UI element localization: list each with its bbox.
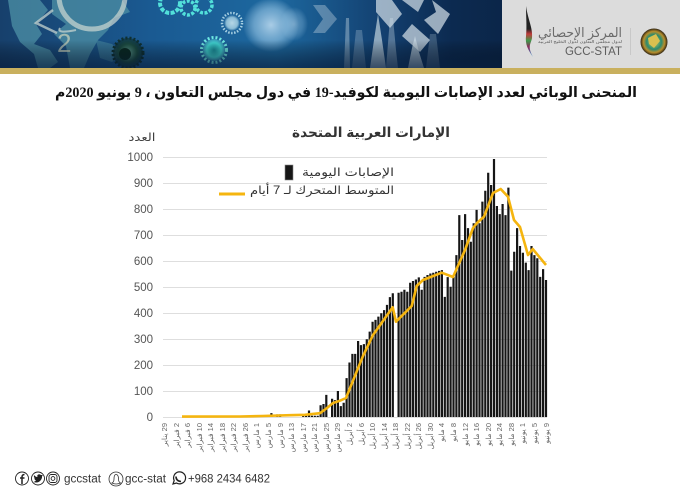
daily cases bars — [271, 159, 546, 417]
logo latin name: GCC-STAT — [565, 44, 623, 58]
title: المنحنى الوبائي لعدد الإصابات اليومية لكوفيد-19 في دول مجلس التعاون ، 9 يونيو 2020م — [55, 85, 637, 101]
x-axis date labels: 16 مايو — [472, 423, 481, 447]
x-axis date labels: 14 أبريل — [379, 423, 389, 450]
icon: cyan virus — [202, 38, 226, 62]
footer social contacts — [16, 472, 270, 486]
header banner — [0, 0, 503, 68]
ring and numeral: 2 — [57, 28, 71, 58]
icon: facebook — [16, 472, 28, 485]
y-axis labels — [127, 152, 153, 424]
phone number: +968 2434 6482 — [188, 474, 270, 486]
x-axis date labels: 2 فبراير — [172, 423, 181, 449]
world map — [8, 0, 130, 68]
handle: gccstat: gccstat — [64, 474, 102, 486]
x-axis date labels: 2 أبريل — [344, 423, 354, 445]
x-axis date labels: 13 مارس — [287, 423, 296, 453]
legend — [219, 165, 394, 198]
chart title: الإمارات العربية المتحدة — [292, 125, 450, 140]
x-axis date labels: 10 فبراير — [195, 423, 204, 453]
icon: GCC emblem — [640, 28, 668, 56]
x-axis date labels: 1 يونيو — [518, 423, 527, 444]
handle: gcc-stat: gcc-stat — [125, 474, 167, 486]
x-axis date labels: 6 أبريل — [356, 423, 366, 445]
x-axis date labels: 29 مارس — [333, 423, 342, 453]
icon: instagram — [46, 472, 60, 485]
skyline — [344, 14, 440, 68]
x-axis date labels: 9 مارس — [276, 423, 285, 448]
icon: pale virus — [222, 13, 242, 33]
x-axis date labels: 28 مايو — [507, 423, 516, 447]
x-axis date labels: 14 فبراير — [206, 423, 215, 453]
x-axis date labels: 20 مايو — [484, 423, 493, 447]
y-axis labels: 1000 — [127, 152, 153, 164]
logo arabic name: المركز الإحصائي — [538, 25, 622, 41]
x-axis date labels: 18 أبريل — [390, 423, 400, 450]
x-axis date labels: 4 مايو — [437, 423, 446, 443]
gold band — [0, 68, 680, 74]
x-axis date labels: 10 أبريل — [367, 423, 377, 450]
x-axis date labels: 8 مايو — [449, 423, 458, 443]
x-axis date labels: 5 مارس — [264, 423, 273, 448]
x-axis date labels: 26 أبريل — [413, 423, 423, 450]
legend label: daily cases: الإصابات اليومية — [302, 167, 394, 180]
x-axis date labels: 1 مارس — [252, 423, 261, 448]
y-axis labels: 800 — [134, 204, 153, 216]
y-axis title: العدد — [128, 132, 156, 144]
icon: cyan virus cluster — [160, 0, 212, 15]
logo subtitle: لدول مجلس التعاون لدول الخليج العربية — [538, 39, 622, 44]
x-axis date labels: 25 مارس — [322, 423, 331, 453]
icon: snapchat — [109, 472, 123, 486]
y-axis labels: 200 — [134, 360, 153, 372]
y-axis labels: 700 — [134, 230, 153, 242]
x-axis date labels: 17 مارس — [299, 423, 308, 453]
y-axis labels: 500 — [134, 282, 153, 294]
x-axis date labels: 6 فبراير — [183, 423, 192, 449]
x-axis date labels: 22 أبريل — [402, 423, 412, 450]
x-axis date labels: 29 يناير — [160, 423, 169, 447]
logo panel — [502, 0, 680, 68]
icon: twitter — [32, 472, 44, 485]
x-axis date labels: 12 مايو — [461, 423, 470, 447]
x-axis date labels — [160, 423, 551, 453]
legend swatch: daily cases — [285, 165, 293, 180]
icon: ribbon — [526, 6, 533, 57]
x-axis date labels: 9 يونيو — [542, 423, 551, 444]
legend label: moving average: المتوسط المتحرك لـ 7 أيام — [250, 182, 394, 198]
legend swatch: moving average — [219, 192, 245, 196]
y-axis labels: 400 — [134, 308, 153, 320]
x-axis date labels: 21 مارس — [310, 423, 319, 453]
x-axis date labels: 5 يونيو — [530, 423, 539, 444]
icon: dark green virus — [113, 38, 143, 68]
x-axis date labels: 22 فبراير — [229, 423, 238, 453]
y-axis labels: 100 — [134, 386, 153, 398]
x-axis date labels: 18 فبراير — [218, 423, 227, 453]
7-day moving average line — [182, 189, 546, 417]
y-axis labels: 900 — [134, 178, 153, 190]
chart — [127, 125, 551, 453]
icon: whatsapp — [173, 472, 186, 484]
icon: dispersing particles — [243, 0, 308, 52]
y-axis labels: 600 — [134, 256, 153, 268]
arrows — [313, 0, 450, 52]
y-axis labels: 300 — [134, 334, 153, 346]
y-axis labels: 0 — [147, 412, 153, 424]
ring and numeral — [36, 0, 125, 58]
x-axis date labels: 26 فبراير — [241, 423, 250, 453]
x-axis date labels: 24 مايو — [495, 423, 504, 447]
x-axis date labels: 30 أبريل — [425, 423, 435, 450]
